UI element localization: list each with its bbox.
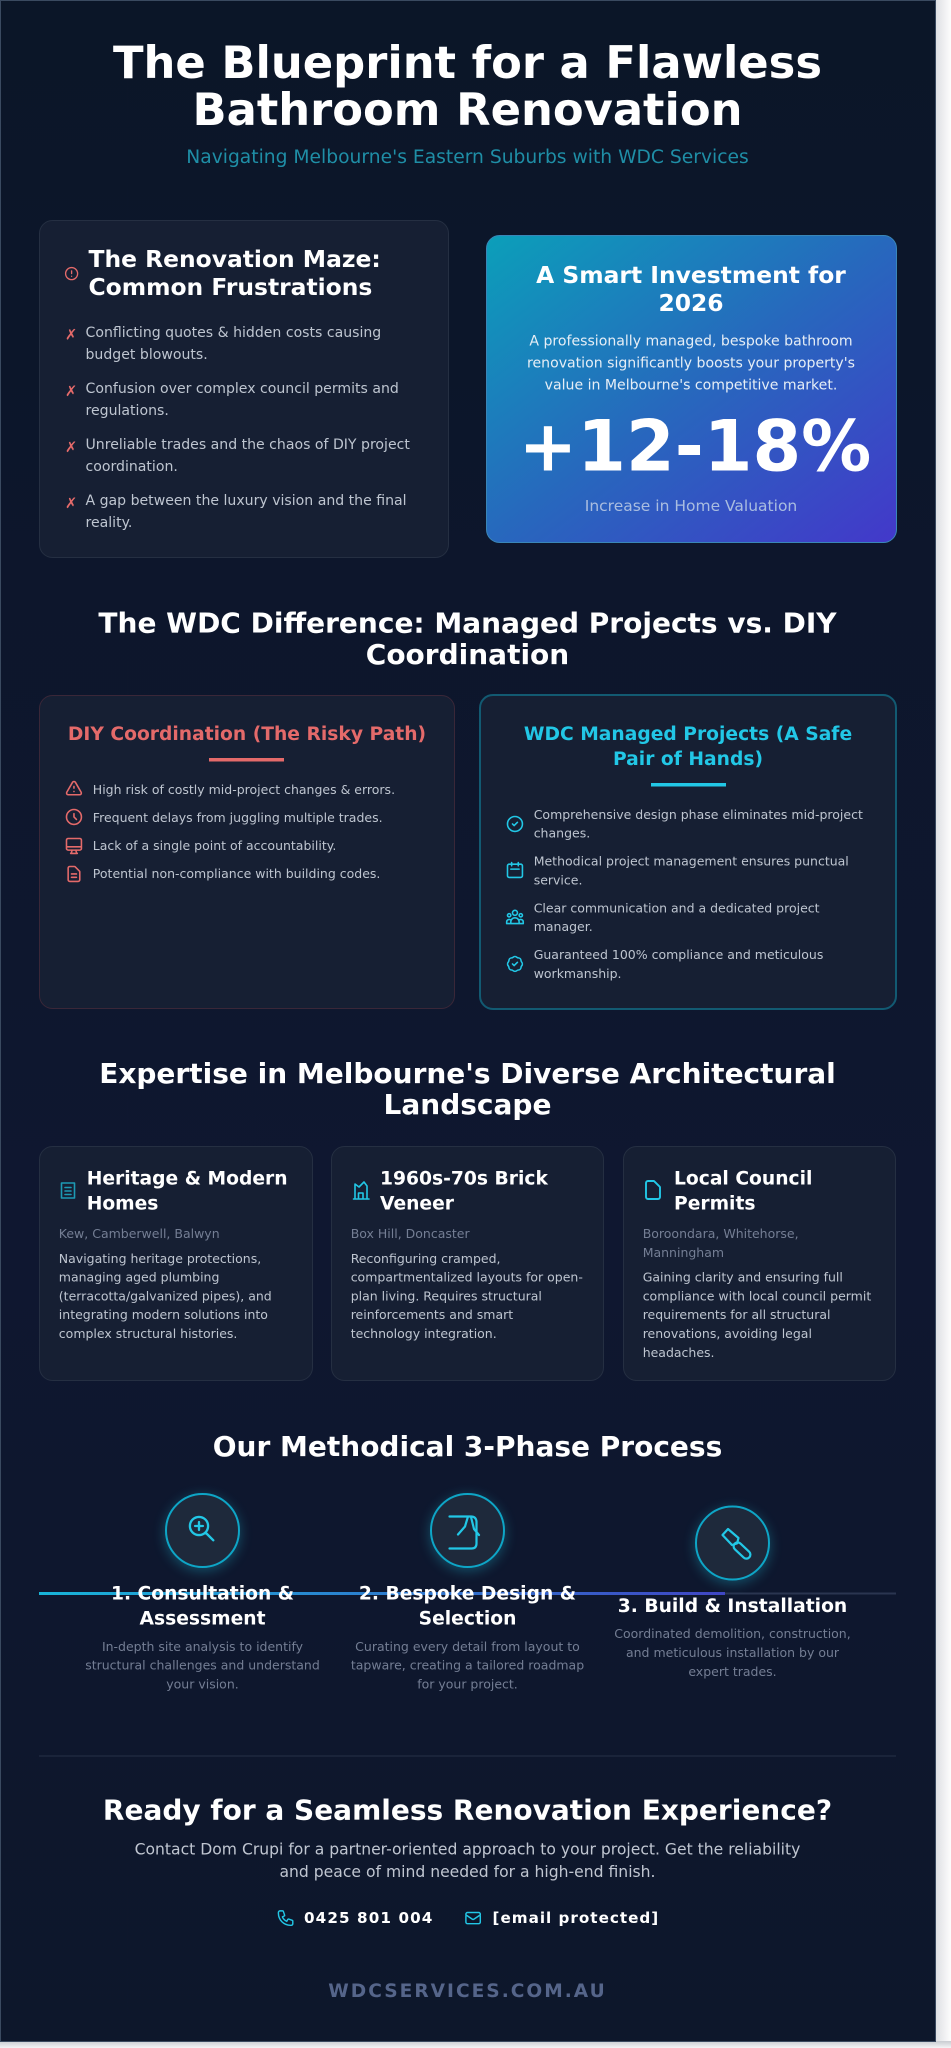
DIY list: High risk of costly mid-project changes & errors. <box>93 782 395 797</box>
permits description: Gaining clarity and ensuring full <box>643 1270 843 1284</box>
icon: monitor <box>66 838 81 853</box>
heritage description <box>59 1251 272 1341</box>
WDC list: workmanship. <box>534 966 622 981</box>
icon: check circle <box>507 816 522 831</box>
brick veneer suburbs: Box Hill, Doncaster <box>351 1226 471 1241</box>
step 2 description: Curating every detail from layout to <box>355 1639 580 1654</box>
email address: [email protected] <box>492 1909 659 1927</box>
permits description: renovations, avoiding legal <box>643 1326 812 1341</box>
step 3 description: expert trades. <box>688 1664 777 1679</box>
step 3 description: Coordinated demolition, construction, <box>614 1626 851 1641</box>
heading: WDC difference: Coordination <box>366 638 569 671</box>
step 2 description: tapware, creating a tailored roadmap <box>351 1658 584 1672</box>
heritage heading: Heritage & Modern <box>87 1168 288 1190</box>
heading: expertise <box>99 1057 836 1121</box>
heading: expertise: Landscape <box>384 1088 551 1121</box>
frustrations list: regulations. <box>86 403 169 419</box>
brick veneer description: plan living. Requires structural <box>351 1288 542 1304</box>
frustrations list: A gap between the luxury vision and the final <box>86 493 407 509</box>
brick veneer description: compartmentalized layouts for open- <box>351 1270 583 1284</box>
process timeline line <box>39 1592 896 1595</box>
heading: process: Our Methodical 3-Phase Process <box>213 1430 722 1463</box>
frustrations list: Conflicting quotes & hidden costs causing <box>86 325 381 341</box>
frustrations list: ✗ <box>65 495 77 512</box>
heading: renovation maze <box>88 245 381 301</box>
step 1 description: structural challenges and understand <box>85 1658 320 1672</box>
WDC list: Comprehensive design phase eliminates mid-project <box>534 807 863 822</box>
permits description <box>643 1270 871 1360</box>
icon: document <box>646 1181 660 1199</box>
step 2 heading: 2. Bespoke Design & <box>359 1584 576 1604</box>
permits councils: Manningham <box>643 1245 724 1260</box>
frustrations list: ✗ <box>65 326 77 344</box>
heritage heading <box>87 1168 288 1214</box>
WDC heading: WDC Managed Projects (A Safe <box>524 724 852 745</box>
subtitle: Navigating Melbourne's Eastern Suburbs with WDC Services <box>186 147 749 168</box>
phone number: 0425 801 004 <box>304 1909 433 1927</box>
step 1 description <box>85 1639 320 1692</box>
heritage heading: Homes <box>87 1194 158 1214</box>
step 1 description: your vision. <box>166 1676 239 1692</box>
step 1: consultation <box>85 1494 320 1692</box>
permits heading <box>674 1168 812 1214</box>
panel: heritage and modern homes <box>40 1146 312 1380</box>
step 3: build <box>614 1506 851 1679</box>
step 2: design <box>351 1494 584 1692</box>
heritage description: complex structural histories. <box>59 1326 237 1341</box>
brick veneer heading: 1960s-70s Brick <box>380 1168 548 1190</box>
icon: tool circle <box>696 1506 769 1580</box>
WDC heading: Pair of Hands) <box>613 749 763 770</box>
title: Bathroom Renovation <box>192 83 743 136</box>
brick veneer heading: Veneer <box>380 1194 455 1214</box>
step 1 description: In-depth site analysis to identify <box>102 1639 304 1654</box>
brick veneer description: reinforcements and smart <box>351 1307 513 1322</box>
frustrations list: reality. <box>86 515 132 531</box>
frustrations list: ✗ <box>65 383 77 400</box>
step 3 description: and meticulous installation by our <box>626 1645 840 1660</box>
frustrations list: budget blowouts. <box>86 347 208 363</box>
heading: WDC difference <box>98 606 837 671</box>
DIY list: Frequent delays from juggling multiple trades. <box>93 810 383 825</box>
DIY list <box>93 782 395 881</box>
icon: alert circle <box>66 268 78 280</box>
icon: design mark circle <box>431 1494 504 1567</box>
icon: magnifier circle <box>166 1494 239 1567</box>
panel: the renovation maze <box>40 220 448 558</box>
call to action text <box>135 1840 800 1881</box>
footer website: WDCSERVICES.COM.AU <box>328 1981 607 2002</box>
heritage description: integrating modern solutions into <box>59 1307 268 1322</box>
DIY heading: DIY Coordination (The Risky Path) <box>68 724 426 745</box>
step 1 heading: 1. Consultation & <box>111 1584 294 1604</box>
title: The Blueprint for a Flawless <box>113 36 822 89</box>
WDC list: changes. <box>534 826 590 840</box>
step 2 description <box>351 1639 584 1692</box>
brick veneer description: technology integration. <box>351 1326 497 1341</box>
heading: smart investment <box>536 261 846 317</box>
call to action text: and peace of mind needed for a high-end finish. <box>279 1863 656 1881</box>
permits description: compliance with local council permit <box>643 1288 871 1304</box>
heading: expertise: Expertise in Melbourne's Diverse Architectural <box>99 1057 836 1090</box>
step 1 heading <box>111 1584 294 1630</box>
icon: clock <box>66 809 81 824</box>
permits description: headaches. <box>643 1345 715 1360</box>
WDC underline <box>651 783 726 786</box>
step 3 description <box>614 1626 851 1679</box>
investment description: renovation significantly boosts your property's <box>527 356 855 372</box>
brick veneer heading <box>380 1168 548 1214</box>
panel: smart investment <box>486 236 896 542</box>
permits councils <box>643 1226 799 1260</box>
DIY list: Lack of a single point of accountability. <box>93 838 336 853</box>
icon: envelope <box>466 1912 480 1924</box>
permits heading: Local Council <box>674 1168 812 1190</box>
WDC heading <box>524 724 852 770</box>
WDC list: service. <box>534 872 582 888</box>
frustrations list <box>65 325 410 531</box>
WDC list: Methodical project management ensures punctual <box>534 854 849 868</box>
heritage description: Navigating heritage protections, <box>59 1251 261 1266</box>
step 2 heading <box>359 1584 576 1630</box>
panel: local council permits <box>624 1146 896 1380</box>
frustrations list: ✗ <box>65 439 77 456</box>
heritage description: managing aged plumbing <box>59 1270 219 1284</box>
frustrations list: Confusion over complex council permits and <box>86 381 399 397</box>
step 2 heading: Selection <box>419 1608 516 1630</box>
panel: brick veneer <box>332 1146 604 1380</box>
icon: calendar <box>507 862 522 877</box>
icon: warning <box>67 781 81 795</box>
heading: renovation maze: The Renovation Maze: <box>88 245 381 273</box>
investment description: value in Melbourne's competitive market. <box>545 378 837 394</box>
permits description: requirements for all structural <box>643 1307 831 1322</box>
icon: badge check <box>508 957 522 971</box>
icon: phone <box>278 1911 293 1925</box>
investment description <box>527 334 855 394</box>
icon: document <box>68 866 80 881</box>
heritage description: (terracotta/galvanized pipes), and <box>59 1288 272 1304</box>
heading: renovation maze: Common Frustrations <box>88 273 372 301</box>
title <box>113 36 822 136</box>
permits councils: Boroondara, Whitehorse, <box>643 1226 799 1241</box>
investment description: A professionally managed, bespoke bathroom <box>529 334 853 350</box>
panel: DIY coordination <box>40 696 454 1008</box>
WDC list <box>534 807 863 981</box>
brick veneer description: Reconfiguring cramped, <box>351 1251 501 1266</box>
WDC list: manager. <box>534 919 593 934</box>
contact: email <box>466 1909 659 1927</box>
divider <box>39 1756 896 1757</box>
icon: people <box>507 910 523 924</box>
WDC list: Clear communication and a dedicated project <box>534 900 820 916</box>
heading: WDC difference: The WDC Difference: Managed Projects vs. DIY <box>98 606 837 640</box>
DIY underline <box>209 758 284 762</box>
frustrations list: Unreliable trades and the chaos of DIY project <box>86 437 410 453</box>
heading: smart investment: A Smart Investment for <box>536 261 846 289</box>
frustrations list: coordination. <box>86 459 178 475</box>
icon: building <box>62 1183 74 1198</box>
permits heading: Permits <box>674 1194 756 1214</box>
DIY list: Potential non-compliance with building codes. <box>93 866 380 881</box>
brick veneer description <box>351 1251 583 1341</box>
heritage suburbs: Kew, Camberwell, Balwyn <box>59 1226 220 1241</box>
panel: WDC managed projects <box>480 695 896 1009</box>
step 3 heading: 3. Build & Installation <box>618 1596 847 1617</box>
WDC list: Guaranteed 100% compliance and meticulous <box>534 947 823 962</box>
statistic label: Increase in Home Valuation <box>585 497 797 515</box>
call to action heading: Ready for a Seamless Renovation Experience? <box>103 1794 832 1826</box>
contact: phone <box>278 1909 433 1927</box>
step 2 description: for your project. <box>417 1676 518 1692</box>
heading: smart investment: 2026 <box>658 289 724 317</box>
statistic: +12-18% <box>519 406 871 488</box>
call to action text: Contact Dom Crupi for a partner-oriented approach to your project. Get the reliability <box>135 1840 800 1858</box>
step 1 heading: Assessment <box>139 1608 266 1630</box>
icon: house <box>354 1182 369 1199</box>
